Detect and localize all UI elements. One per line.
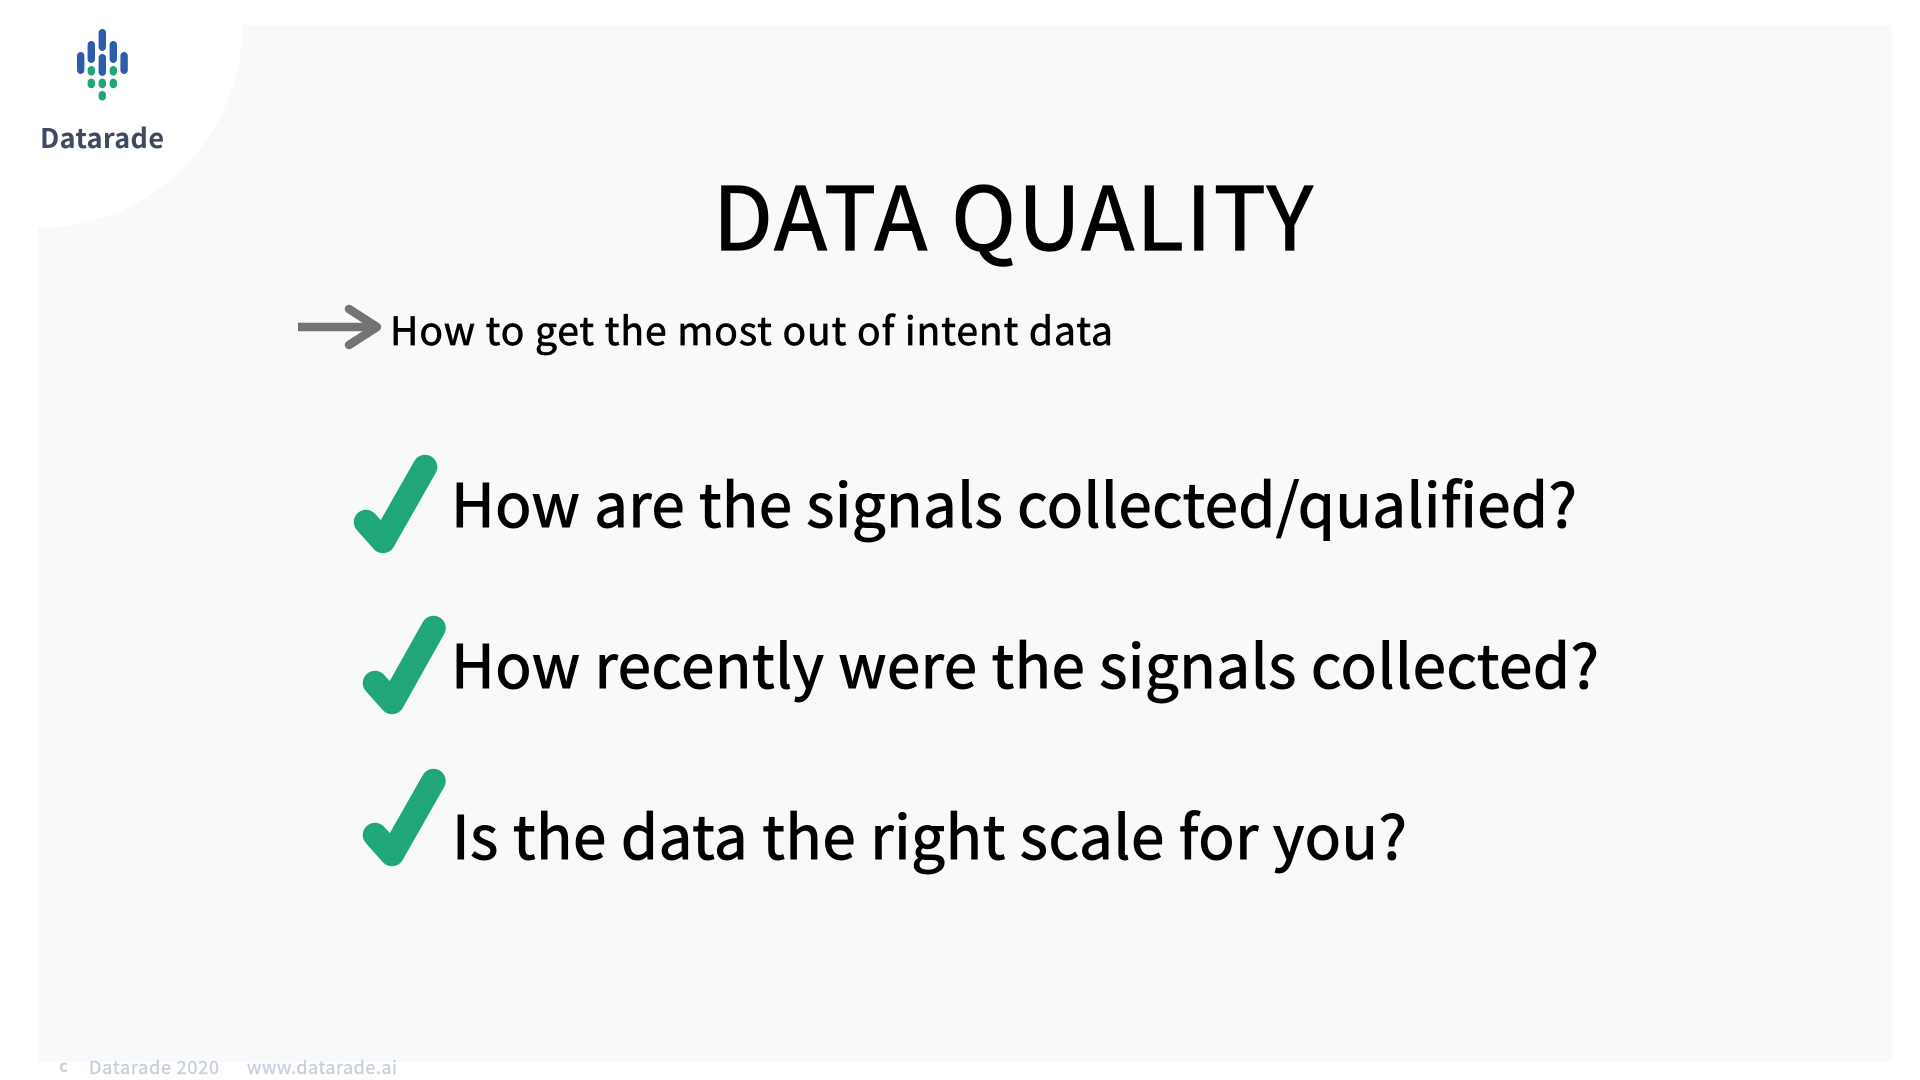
footer url: www.datarade.ai — [247, 1054, 397, 1080]
question text: Is the data the right scale for you? — [452, 790, 1407, 877]
logo wordmark: Datarade — [40, 117, 164, 156]
icon: check mark — [366, 467, 425, 541]
subtitle: How to get the most out of intent data — [390, 301, 1113, 357]
checklist item 3 — [375, 781, 1407, 877]
checklist item 2 — [375, 619, 1599, 706]
arrow — [298, 309, 377, 345]
footer company and year: Datarade 2020 — [89, 1054, 219, 1080]
logo corner: white quarter circle — [0, 0, 243, 228]
icon: check mark — [375, 628, 434, 702]
checklist item 1 — [366, 458, 1577, 545]
logo: Datarade — [40, 29, 164, 156]
question text: How are the signals collected/qualified? — [451, 458, 1577, 545]
question text: How recently were the signals collected? — [451, 619, 1599, 706]
title: DATA QUALITY — [713, 150, 1314, 276]
icon: check mark — [375, 781, 434, 854]
icon: logo dots — [88, 66, 117, 101]
copyright mark: c — [59, 1052, 68, 1077]
footer — [59, 1052, 397, 1080]
icon: logo bars — [77, 29, 128, 76]
